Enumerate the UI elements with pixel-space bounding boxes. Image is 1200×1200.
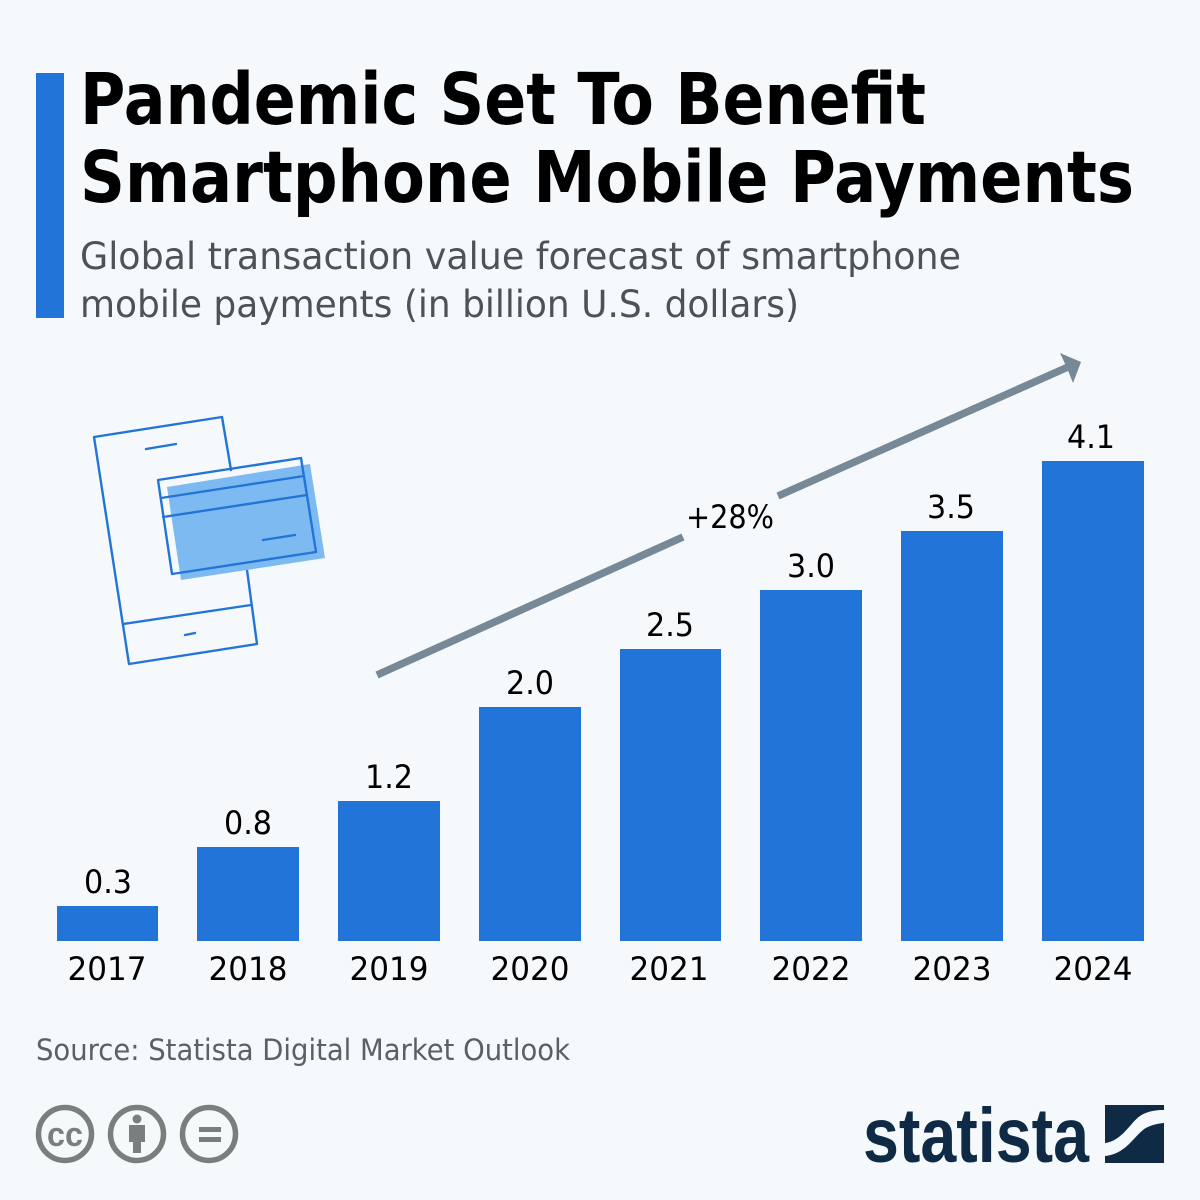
- bar 2023: 3.5: [927, 488, 975, 526]
- arrow: growth trend with +28% label: +28%: [686, 498, 774, 536]
- bar 2020: 2.0: [506, 664, 554, 702]
- subtitle: mobile payments (in billion U.S. dollars): [80, 283, 799, 326]
- icon: smartphone and credit card: [94, 417, 325, 664]
- bar chart: [57, 418, 1144, 988]
- bar 2023: [901, 488, 1003, 988]
- bar 2021: 2021: [630, 950, 708, 988]
- bar 2018: 2018: [208, 950, 288, 988]
- icon: cc license: [38, 1108, 92, 1160]
- icon: cc license: cc: [47, 1116, 83, 1154]
- bar 2021: 2.5: [646, 606, 694, 644]
- bar 2017: 0.3: [84, 863, 132, 901]
- title accent bar: [36, 73, 64, 318]
- title: Pandemic Set To Benefit: [80, 58, 926, 141]
- bar 2024: 2024: [1054, 950, 1132, 988]
- bar 2019: 1.2: [365, 758, 413, 796]
- subtitle: [80, 235, 961, 326]
- bar 2017: 2017: [68, 950, 146, 988]
- bar 2024: [1042, 418, 1144, 988]
- bar 2022: 2022: [772, 950, 850, 988]
- subtitle: Global transaction value forecast of smartphone: [80, 235, 961, 278]
- icon: no derivatives: [182, 1108, 236, 1160]
- bar 2018: [197, 804, 299, 988]
- bar 2024: 4.1: [1067, 418, 1115, 456]
- bar 2020: [479, 664, 581, 988]
- source: Source: Statista Digital Market Outlook: [36, 1033, 570, 1067]
- statista logo: statista: [863, 1093, 1090, 1179]
- arrow: growth trend with +28% label: [377, 353, 1081, 675]
- icon: attribution: [110, 1108, 164, 1160]
- bar 2023: 2023: [912, 950, 992, 988]
- title: [80, 58, 1134, 219]
- bar 2019: 2019: [350, 950, 428, 988]
- bar 2018: 0.8: [224, 804, 272, 842]
- bar 2021: [620, 606, 721, 988]
- bar 2019: [338, 758, 440, 988]
- bar 2020: 2020: [490, 950, 570, 988]
- bar 2022: 3.0: [787, 547, 835, 585]
- bar 2017: [57, 863, 158, 988]
- bar 2022: [760, 547, 862, 988]
